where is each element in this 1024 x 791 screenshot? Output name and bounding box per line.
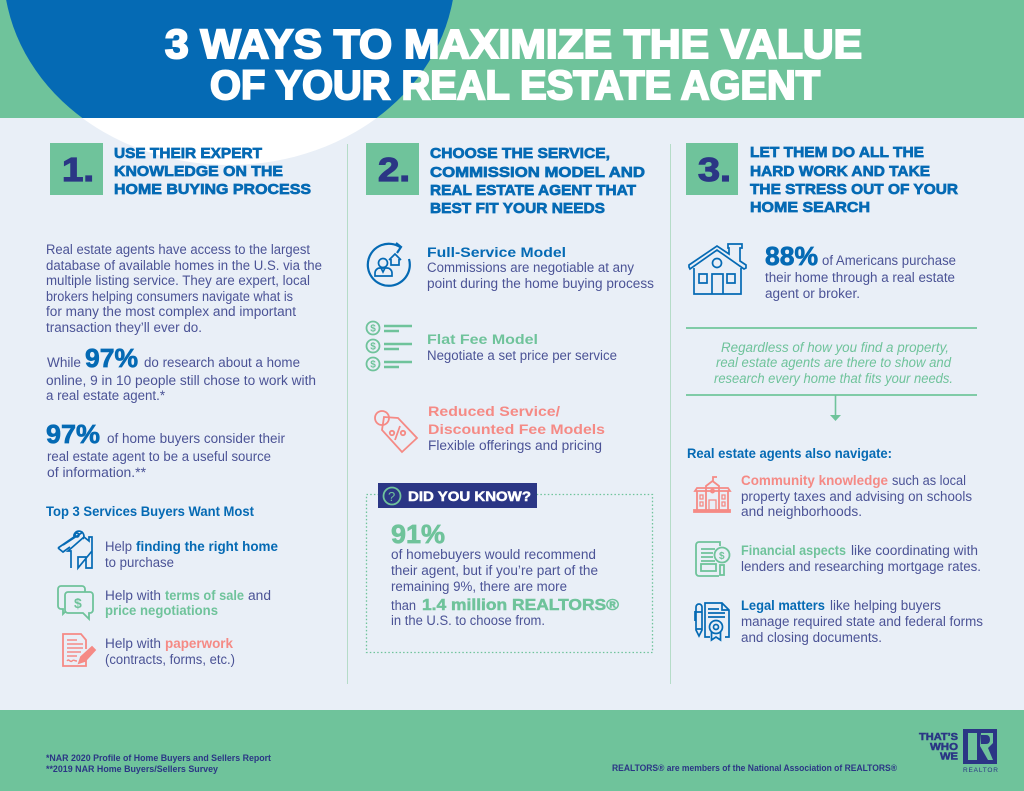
step 1 heading: USE THEIR EXPERT	[114, 145, 262, 162]
item: community knowledge: Community knowledge	[741, 472, 888, 488]
step 3 heading: LET THEM DO ALL THE	[750, 144, 924, 161]
logo: that's who we realtor	[919, 729, 998, 774]
did you know label: ?	[388, 489, 395, 504]
icon: agent in circular arrow	[368, 243, 410, 286]
footnotes: **2019 NAR Home Buyers/Sellers Survey	[46, 764, 218, 774]
icon: dollar list	[366, 322, 412, 370]
footnotes	[46, 753, 271, 774]
intro paragraph: brokers helping consumers navigate what is	[46, 289, 293, 304]
step 3 heading: HOME SEARCH	[750, 199, 870, 216]
model: reduced service: Reduced Service/	[428, 403, 560, 419]
item: legal matters: Legal matters	[741, 597, 825, 613]
title	[165, 21, 862, 108]
step 3 heading: HARD WORK AND TAKE	[750, 163, 930, 180]
stat: 91%: of homebuyers would recommend	[391, 547, 596, 562]
icon: dollar list: $	[370, 360, 376, 370]
model: flat fee	[427, 331, 617, 363]
membership note: REALTORS® are members of the National Association of REALTORS®	[612, 763, 897, 773]
stat: 88%	[765, 241, 956, 301]
item: community knowledge: property taxes and advising on schools	[741, 489, 972, 504]
icon: keys and house	[58, 531, 92, 568]
step 1 heading: HOME BUYING PROCESS	[114, 181, 311, 198]
service: paperwork	[105, 635, 235, 667]
stat: 97% useful source: of home buyers consider their	[107, 431, 286, 446]
quote with rules: real estate agents are there to show and	[716, 355, 951, 370]
step 1 number badge: 1.	[62, 151, 94, 188]
stat: 97% useful source: 97%	[46, 419, 100, 449]
service: finding home: Help	[105, 539, 132, 554]
item: legal matters: and closing documents.	[741, 630, 882, 645]
service: negotiations	[105, 587, 271, 618]
service: negotiations: terms of sale	[165, 587, 244, 603]
arrow: down	[830, 395, 841, 421]
did you know label: DID YOU KNOW?	[408, 488, 531, 504]
stat: 97% research online: a real estate agent.*	[46, 388, 166, 403]
stat: 91%: 1.4 million REALTORS®	[422, 597, 619, 614]
item: legal matters	[741, 597, 983, 645]
model: full service: point during the home buying process	[427, 276, 654, 291]
service: negotiations: price negotiations	[105, 602, 218, 618]
model: reduced service: Flexible offerings and pricing	[428, 438, 602, 453]
intro paragraph: multiple listing service. They are expert, local	[46, 273, 310, 288]
intro paragraph: Real estate agents have access to the largest	[46, 242, 310, 257]
did you know label	[378, 483, 537, 508]
model: reduced service: Discounted Fee Models	[428, 421, 605, 437]
intro paragraph: for many the most complex and important	[46, 304, 296, 319]
icon: speech bubbles with dollar	[58, 586, 93, 619]
footer band	[0, 710, 1024, 791]
quote with rules: research every home that fits your needs.	[714, 371, 953, 386]
step 3 number badge: 3.	[698, 151, 731, 188]
item: financial aspects	[741, 542, 981, 574]
icon: financial document: $	[719, 551, 725, 562]
model: full service	[427, 244, 654, 291]
logo: that's who we realtor: WHO	[930, 741, 958, 753]
quote with rules: Regardless of how you find a property,	[721, 340, 949, 355]
navigate heading: Real estate agents also navigate:	[687, 445, 892, 461]
service: finding home: finding the right home	[136, 538, 278, 554]
panel: step 2	[366, 143, 654, 652]
stat: 91%: their agent, but if you’re part of the	[391, 563, 598, 578]
step 2 number badge	[366, 143, 419, 195]
icon: financial document	[696, 542, 730, 576]
stat: 91%	[391, 519, 619, 628]
icon: legal document and pen	[695, 603, 729, 640]
icon: speech bubbles with dollar: $	[74, 595, 82, 611]
model: flat fee: Flat Fee Model	[427, 331, 538, 347]
stat: 91%: 91%	[391, 519, 445, 549]
icon: dollar list: $	[370, 342, 376, 352]
stat: 97% research online	[46, 343, 316, 403]
logo: that's who we realtor: REALTOR	[963, 767, 998, 774]
item: legal matters: manage required state and federal forms	[741, 614, 983, 629]
step 3 heading	[750, 144, 958, 216]
service: negotiations: Help with	[105, 588, 161, 603]
item: financial aspects: Financial aspects	[741, 542, 846, 558]
intro paragraph	[46, 242, 322, 335]
header band	[0, 0, 1024, 165]
intro paragraph: database of available homes in the U.S. via the	[46, 258, 322, 273]
step 1 heading: KNOWLEDGE ON THE	[114, 163, 283, 180]
stat: 91%: than	[391, 598, 416, 613]
service: paperwork: paperwork	[165, 635, 233, 651]
service: negotiations: and	[248, 588, 271, 603]
icon: house	[689, 244, 746, 294]
model: full service: Full-Service Model	[427, 244, 566, 260]
step 2 heading: CHOOSE THE SERVICE,	[430, 145, 610, 162]
step 2 number badge: 2.	[378, 151, 410, 188]
stat: 97% useful source: of information.**	[47, 465, 147, 480]
step 1 heading	[114, 145, 311, 198]
stat: 97% research online: online, 9 in 10 people still chose to work with	[46, 373, 316, 388]
step 2 heading: COMMISSION MODEL AND	[430, 164, 645, 181]
footnotes: *NAR 2020 Profile of Home Buyers and Sellers Report	[46, 753, 271, 763]
icon: school building	[694, 477, 730, 512]
logo: that's who we realtor: WE	[940, 750, 958, 762]
stat: 91%: in the U.S. to choose from.	[391, 613, 545, 628]
stat: 97% useful source: real estate agent to be a useful source	[47, 449, 271, 464]
item: financial aspects: like coordinating with	[851, 543, 978, 558]
item: community knowledge: and neighborhoods.	[741, 504, 862, 519]
stat: 88%: 88%	[765, 241, 818, 271]
stat: 91%: remaining 9%, there are more	[391, 579, 567, 594]
item: legal matters: like helping buyers	[830, 598, 941, 613]
callout: did you know	[366, 483, 652, 652]
step 2 heading: BEST FIT YOUR NEEDS	[430, 200, 605, 217]
service: paperwork: Help with	[105, 636, 161, 651]
icon: document and pen	[63, 634, 95, 666]
quote with rules	[686, 328, 977, 395]
item: community knowledge	[741, 472, 972, 519]
step 3 number badge	[686, 143, 738, 195]
stat: 88%: agent or broker.	[765, 286, 860, 301]
service: finding home: to purchase	[105, 555, 174, 570]
icon: discount tag	[375, 411, 417, 452]
panel: step 3	[686, 143, 983, 645]
title: 3 WAYS TO MAXIMIZE THE VALUE	[165, 21, 862, 67]
icon: dollar list: $	[370, 324, 376, 334]
model: full service: Commissions are negotiable at any	[427, 260, 634, 275]
step 3 heading: THE STRESS OUT OF YOUR	[750, 181, 958, 198]
model: reduced service	[428, 403, 605, 453]
step 1 number badge	[50, 143, 103, 195]
item: financial aspects: lenders and researching mortgage rates.	[741, 559, 981, 574]
service: paperwork: (contracts, forms, etc.)	[105, 652, 235, 667]
service: finding home	[105, 538, 278, 570]
stat: 97% research online: do research about a home	[144, 355, 300, 370]
stat: 88%: of Americans purchase	[822, 253, 956, 268]
title: OF YOUR REAL ESTATE AGENT	[210, 62, 820, 108]
item: community knowledge: such as local	[892, 473, 966, 488]
stat: 97% research online: 97%	[85, 343, 138, 373]
step 2 heading: REAL ESTATE AGENT THAT	[430, 182, 636, 199]
step 2 heading	[430, 145, 645, 217]
stat: 88%: their home through a real estate	[765, 270, 955, 285]
panel: step 1	[46, 143, 322, 667]
intro paragraph: transaction they’ll ever do.	[46, 320, 202, 335]
services heading: Top 3 Services Buyers Want Most	[46, 503, 254, 519]
stat: 97% useful source	[46, 419, 286, 480]
stat: 97% research online: While	[47, 355, 81, 370]
model: flat fee: Negotiate a set price per service	[427, 348, 617, 363]
logo: that's who we realtor: THAT’S	[919, 731, 958, 743]
